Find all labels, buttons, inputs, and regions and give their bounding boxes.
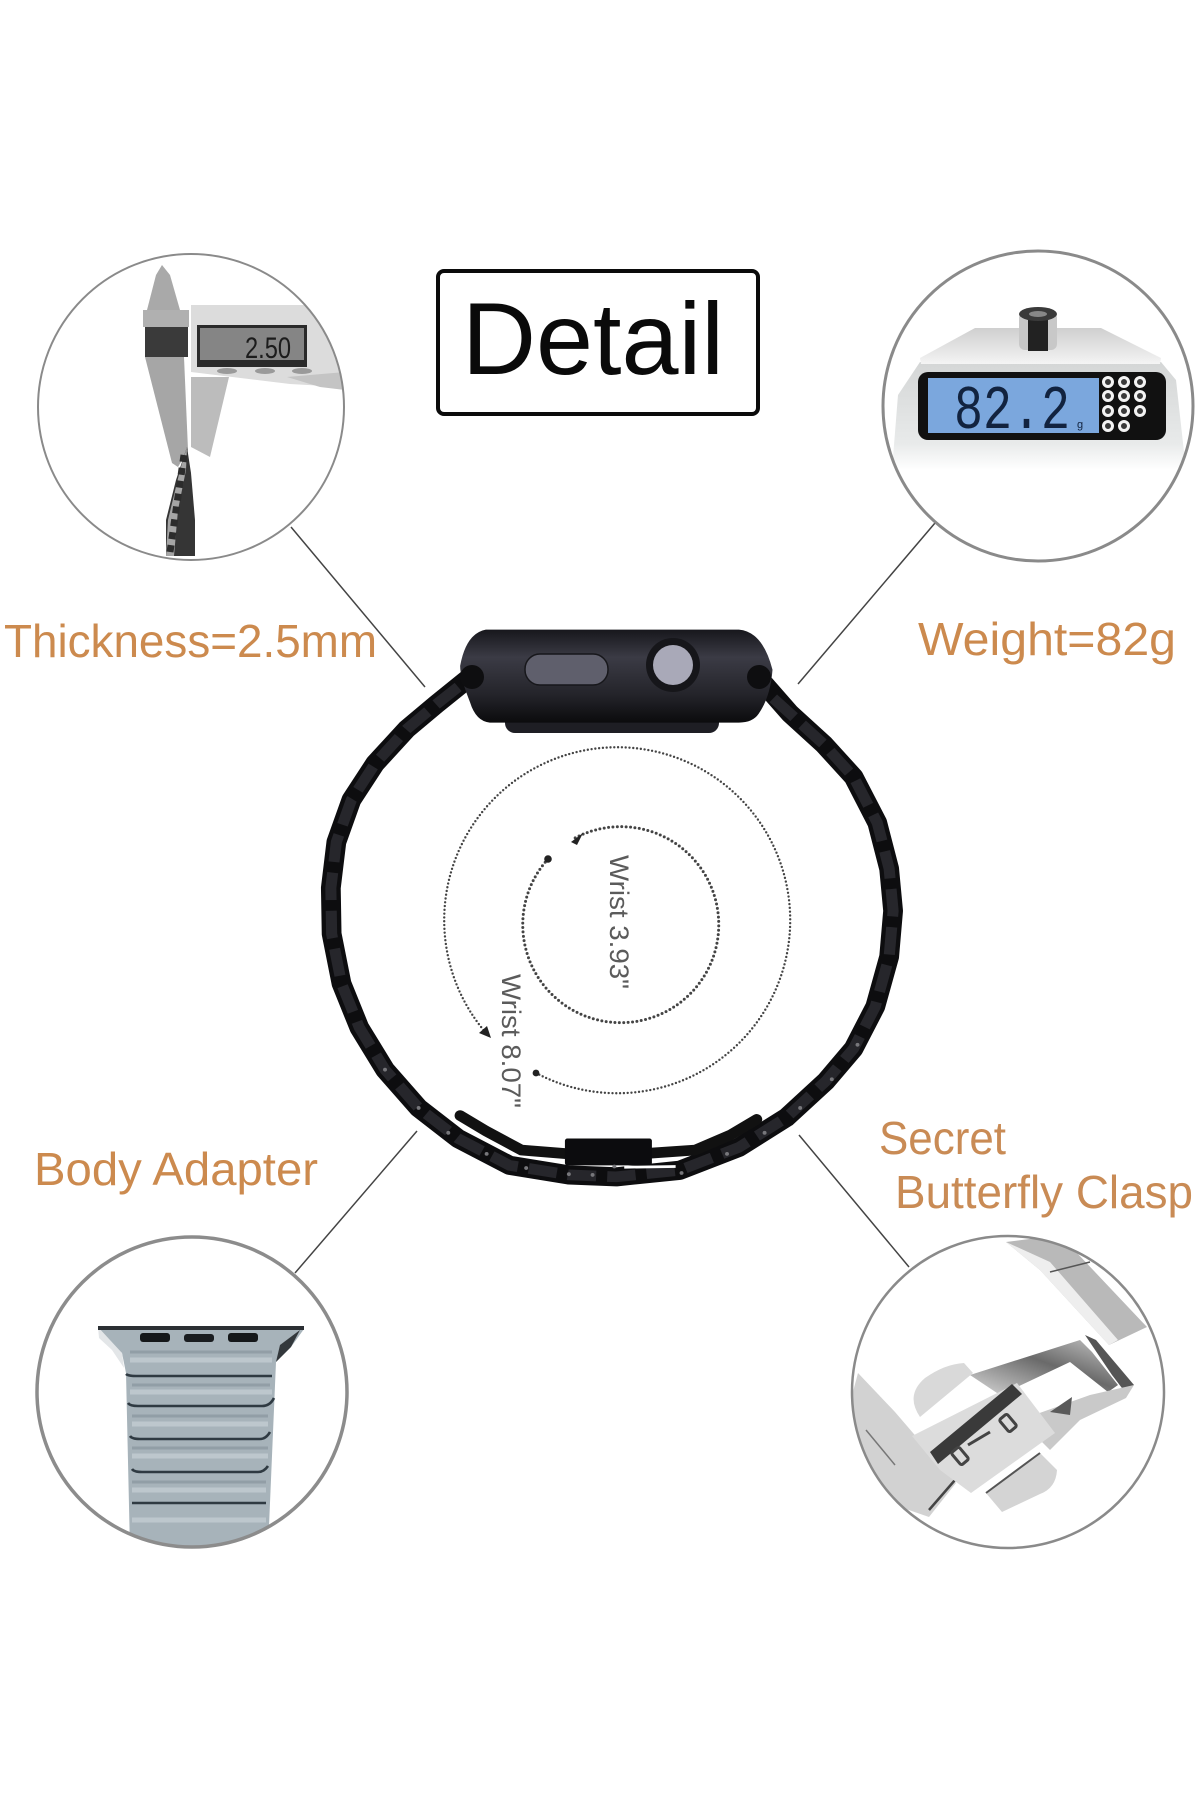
metal band xyxy=(331,675,893,1177)
scale display xyxy=(918,372,1166,440)
label: body adapter: Body Adapter xyxy=(34,1143,318,1195)
label: weight: Weight=82g xyxy=(918,613,1176,665)
title: Detail xyxy=(438,271,758,414)
hinge xyxy=(1085,1335,1134,1392)
adapter slots xyxy=(140,1333,170,1342)
leader line: body adapter xyxy=(295,1131,417,1273)
clasp arm upper xyxy=(970,1340,1118,1395)
band link pins xyxy=(383,1043,859,1177)
caliper jaws xyxy=(147,265,180,310)
watch back sensor xyxy=(505,700,719,733)
upper band link xyxy=(1006,1235,1147,1345)
lower butterfly wing xyxy=(986,1453,1057,1512)
clasp block xyxy=(565,1139,652,1165)
dotted arc: inner wrist xyxy=(523,827,719,1023)
clasp arm lower xyxy=(1040,1385,1134,1450)
caliper body xyxy=(191,305,345,387)
leader line: weight xyxy=(798,523,935,684)
upper butterfly wing xyxy=(914,1363,973,1417)
calibration weight xyxy=(1019,312,1057,350)
start dots xyxy=(544,855,552,863)
panel: body adapter circle xyxy=(37,1237,347,1550)
watch case xyxy=(460,630,773,723)
title: Detail: Detail xyxy=(462,282,724,396)
label: secret butterfly clasp: Secret xyxy=(879,1112,1006,1164)
scale base xyxy=(892,362,1186,470)
side button xyxy=(525,654,608,685)
link texture xyxy=(130,1360,272,1520)
adapter link body xyxy=(98,1327,304,1550)
panel: weight scale circle: g xyxy=(1077,419,1083,431)
scale keypad xyxy=(1104,378,1144,430)
scale platform xyxy=(920,328,1161,364)
panel: weight scale circle xyxy=(883,251,1193,561)
left band link xyxy=(853,1373,956,1517)
panel: weight scale circle: 82.2 xyxy=(954,376,1070,447)
panel: butterfly clasp circle xyxy=(840,1235,1164,1548)
link separators xyxy=(126,1374,274,1503)
label: thickness: Thickness=2.5mm xyxy=(4,615,377,667)
wrist size diagram xyxy=(444,747,790,1108)
leader line: clasp xyxy=(799,1135,909,1267)
dotted arc: outer wrist xyxy=(444,747,790,1093)
folding clasp strip xyxy=(460,1116,757,1154)
centre plate xyxy=(912,1383,1055,1493)
panel: thickness caliper circle xyxy=(38,254,345,560)
band edge sample xyxy=(166,447,195,556)
wrist size diagram: Wrist 8.07" xyxy=(496,974,526,1108)
arrowheads xyxy=(571,833,583,845)
clasp cut-outs xyxy=(951,1414,1017,1465)
lugs xyxy=(460,665,484,689)
leader line: thickness xyxy=(291,527,425,687)
adapter top edge xyxy=(98,1326,304,1330)
panel: thickness caliper circle: 2.50 xyxy=(245,332,291,365)
label: secret butterfly clasp: Butterfly Clasp xyxy=(895,1166,1193,1218)
watch with band xyxy=(331,630,893,1177)
label: secret butterfly clasp xyxy=(879,1112,1193,1218)
caliper display xyxy=(197,325,307,367)
digital crown xyxy=(646,638,700,692)
wrist labels: Wrist 3.93" xyxy=(604,855,634,989)
